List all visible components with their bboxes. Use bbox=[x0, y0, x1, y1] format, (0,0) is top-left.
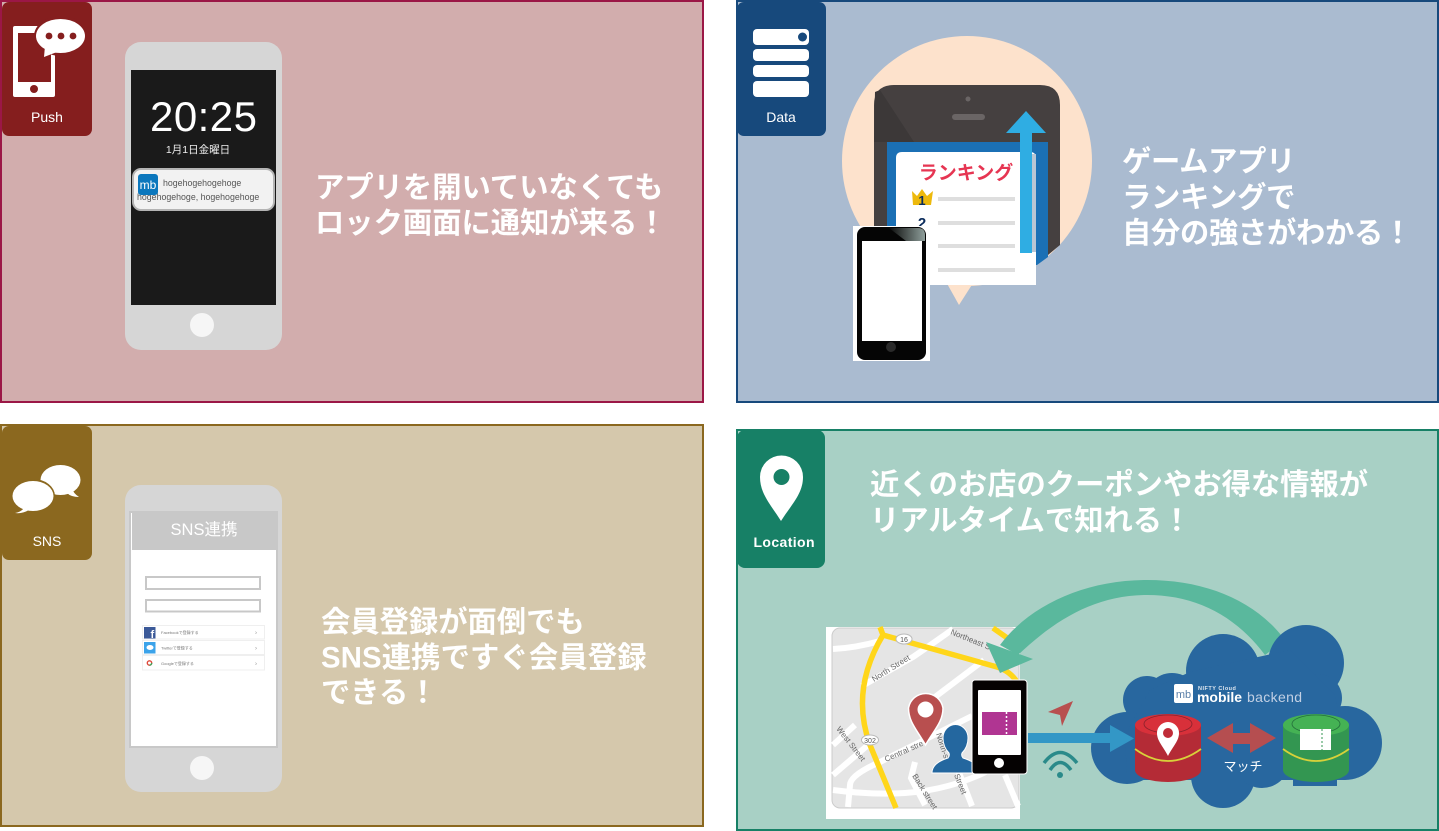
cloud: mobile backend bbox=[1028, 625, 1382, 808]
heading: Push: ロック画面に通知が来る！ bbox=[315, 206, 667, 240]
badge: Location bbox=[737, 430, 825, 568]
phone: coupon bbox=[972, 680, 1027, 774]
phone: SNS signup bbox=[125, 485, 282, 792]
route markers bbox=[862, 634, 912, 745]
map bbox=[826, 627, 1020, 819]
notification: mb bbox=[140, 178, 157, 192]
arrow: match bbox=[1207, 723, 1276, 753]
logo: mobile backend: mb bbox=[1176, 689, 1191, 701]
badge: Data bbox=[737, 2, 826, 136]
screen title: SNS連携 bbox=[171, 520, 237, 539]
second place: 2 bbox=[918, 215, 926, 232]
heading: Data: 自分の強さがわかる！ bbox=[1122, 216, 1412, 250]
pin: user location bbox=[908, 693, 943, 745]
button: Facebook bbox=[142, 626, 264, 641]
street labels: Street bbox=[952, 772, 969, 796]
badge label: Data bbox=[766, 109, 796, 125]
route markers: 16 bbox=[900, 637, 908, 644]
panel: SNS bbox=[1, 425, 703, 826]
heading: SNS: SNS連携ですぐ会員登録 bbox=[321, 642, 647, 674]
notification: hogehogehogehoge bbox=[163, 178, 241, 188]
heading: Data: ランキングで bbox=[1122, 182, 1295, 214]
button: Twitter bbox=[142, 640, 264, 654]
button: Twitter: Twitterで登録する bbox=[161, 644, 193, 650]
badge label: Location bbox=[754, 534, 814, 550]
button: Facebook: f bbox=[150, 629, 154, 641]
button: Twitter: › bbox=[255, 646, 257, 652]
icon: database stack bbox=[753, 29, 809, 97]
button: Facebook: › bbox=[255, 630, 257, 636]
badge label: Push bbox=[31, 109, 63, 125]
badge label: SNS bbox=[33, 533, 61, 549]
map roads bbox=[833, 629, 1018, 807]
street labels: Northeast St bbox=[949, 628, 995, 653]
icon: wifi bbox=[1044, 752, 1077, 778]
button: Facebook: Facebookで登録する bbox=[161, 629, 199, 635]
input fields bbox=[146, 577, 260, 612]
icon: navigation arrow bbox=[1048, 701, 1073, 726]
button: Google: Googleで登録する bbox=[161, 660, 194, 666]
date: 1月1日金曜日 bbox=[166, 143, 230, 156]
phone: lock screen bbox=[125, 42, 282, 350]
heading: Location: リアルタイムで知れる！ bbox=[870, 504, 1191, 538]
notification: hogehogehoge, hogehogehoge bbox=[137, 192, 259, 202]
street labels: Back street bbox=[910, 772, 940, 812]
ranking title: ランキング bbox=[919, 161, 1013, 184]
notification bbox=[133, 169, 274, 210]
ranking rows bbox=[938, 197, 1015, 272]
small phone bbox=[853, 226, 930, 361]
logo: mobile backend: backend bbox=[1247, 689, 1302, 705]
street labels: North-s bbox=[934, 732, 951, 760]
route markers: 302 bbox=[864, 738, 876, 745]
street labels: Central stre bbox=[883, 739, 925, 764]
button: Google bbox=[142, 656, 264, 670]
clock: 20:25 bbox=[150, 93, 257, 140]
heading: Location: 近くのお店のクーポンやお得な情報が bbox=[870, 468, 1368, 502]
label: match: マッチ bbox=[1223, 759, 1263, 774]
panel: Data bbox=[737, 1, 1438, 402]
heading: Data: ゲームアプリ bbox=[1122, 146, 1295, 178]
panel: Location bbox=[737, 430, 1438, 830]
icon: phone with speech bubble bbox=[13, 16, 88, 97]
arrow: rank up bbox=[1006, 111, 1046, 253]
icon: chat bubbles bbox=[11, 465, 80, 513]
street labels: North Street bbox=[870, 653, 912, 684]
icon: person bbox=[932, 724, 981, 773]
badge: Push bbox=[2, 2, 92, 136]
logo: mobile backend bbox=[1174, 684, 1302, 705]
street labels: West Street bbox=[834, 725, 868, 764]
badge: SNS bbox=[2, 426, 92, 560]
heading: SNS: できる！ bbox=[321, 676, 438, 710]
crown: first place bbox=[912, 189, 933, 208]
logo: mobile backend: mobile bbox=[1197, 689, 1242, 705]
arrow: backend to phone bbox=[986, 580, 1285, 673]
street labels bbox=[834, 628, 995, 812]
database: location bbox=[1135, 714, 1201, 782]
crown: first place: 1 bbox=[918, 193, 926, 208]
heading: SNS: 会員登録が面倒でも bbox=[321, 605, 585, 639]
panel: Push bbox=[1, 1, 703, 402]
arrow: phone to backend bbox=[1028, 725, 1134, 752]
database: coupon bbox=[1283, 714, 1349, 782]
icon: map pin bbox=[760, 456, 803, 521]
logo: mobile backend: NIFTY Cloud bbox=[1198, 686, 1236, 692]
heading: Push: アプリを開いていなくても bbox=[315, 172, 663, 204]
illustration: ranking bbox=[842, 36, 1092, 305]
button: Google: › bbox=[255, 662, 257, 668]
